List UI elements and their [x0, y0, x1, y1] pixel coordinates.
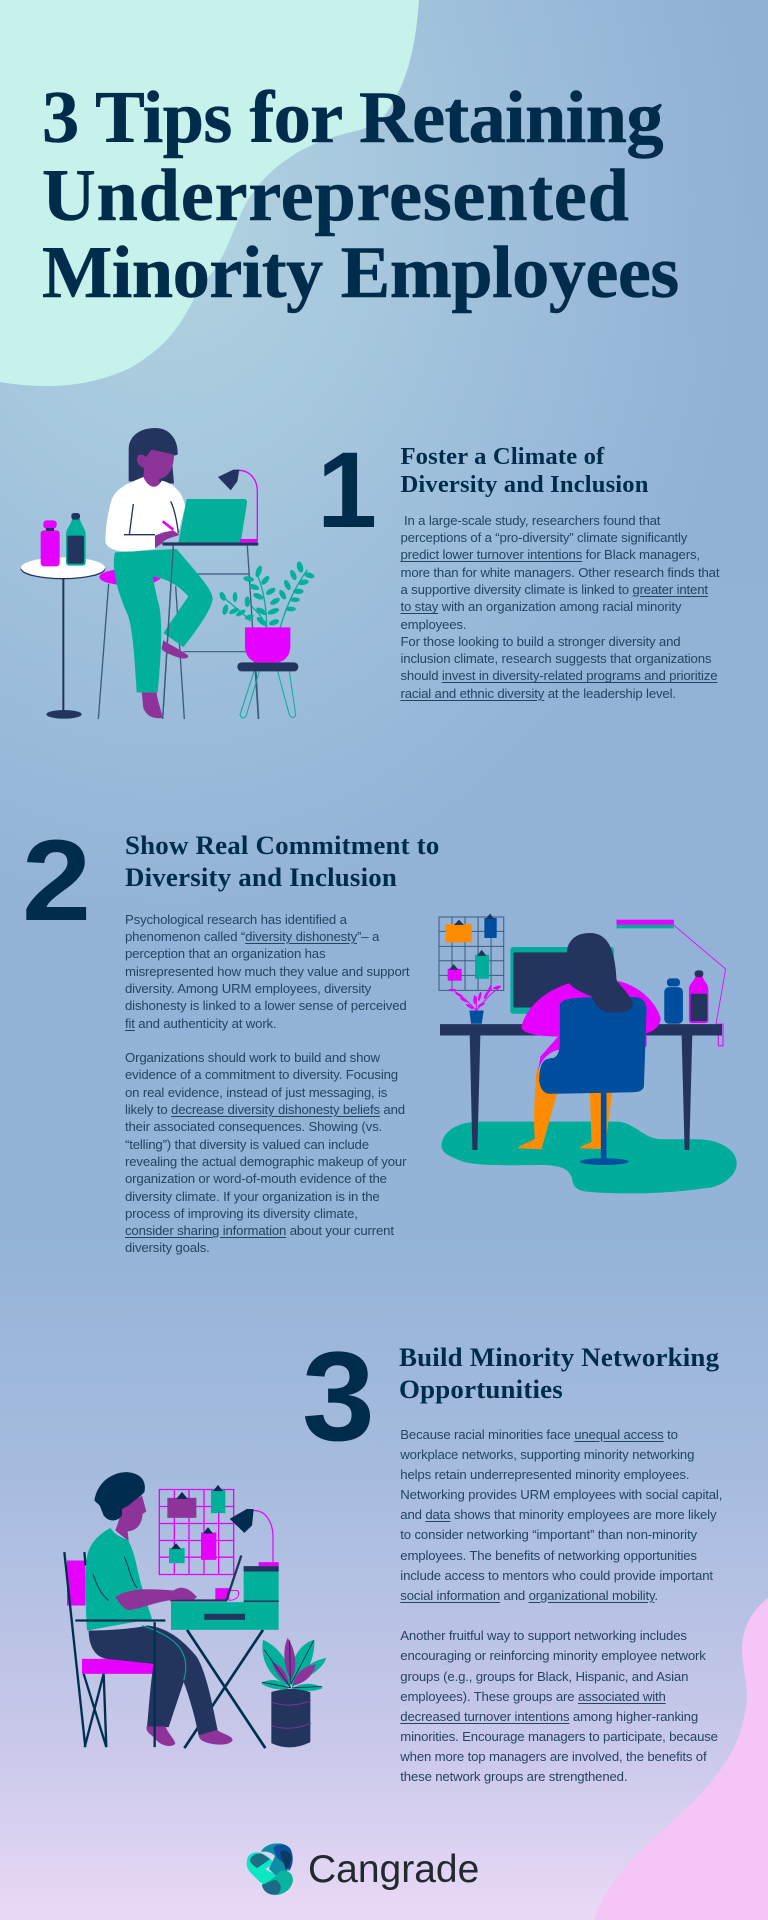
body text 3: employees. The benefits of networking opportunities	[400, 1548, 697, 1563]
illustration 1: woman at standing desk	[20, 428, 314, 719]
task lamp	[617, 920, 726, 1046]
face	[137, 450, 174, 489]
heading 2: Show Real Commitment to	[125, 830, 440, 860]
body text 2: diversity. Among URM employees, diversity	[125, 981, 371, 996]
body text 2: Psychological research has identified a	[125, 912, 347, 927]
body text 2: dishonesty is linked to a lower sense of perceived	[125, 998, 407, 1013]
body text 2: evidence of a commitment to diversity. Focusing	[125, 1067, 398, 1082]
body text 3: Another fruitful way to support networking includes	[400, 1628, 687, 1643]
storage box	[244, 1566, 279, 1602]
body text 2: diversity goals.	[125, 1240, 210, 1255]
shirt	[85, 1528, 152, 1630]
body text 3: social information and organizational mobility.	[400, 1588, 658, 1603]
orange legs	[518, 1067, 613, 1149]
desk top	[162, 542, 258, 546]
body text 1: For those looking to build a stronger diversity and	[400, 634, 680, 649]
monitor	[510, 947, 614, 1014]
shirt lines	[124, 501, 178, 535]
title: Underrepresented	[42, 155, 630, 237]
chair frame	[64, 1552, 106, 1747]
body text 3: helps retain underrepresented minority employees.	[400, 1467, 689, 1482]
logo mark	[246, 1843, 293, 1895]
body text 3: and data shows that minority employees are more likely	[400, 1507, 716, 1522]
illustration 2: woman at desk from behind	[438, 914, 737, 1194]
side table	[21, 557, 105, 719]
trousers	[89, 1626, 218, 1736]
body text 3: employees). These groups are associated with	[400, 1689, 666, 1704]
side desk arm	[75, 1620, 165, 1747]
body text 3: Networking provides URM employees with social capital,	[400, 1487, 722, 1502]
body text 2: perception that an organization has	[125, 946, 325, 961]
chair back	[67, 1560, 154, 1674]
desk frame	[163, 546, 258, 719]
body text 3: decreased turnover intentions among higher-ranking	[400, 1709, 698, 1724]
wire grid	[439, 917, 504, 990]
clipboards	[446, 914, 497, 981]
body text 3: Because racial minorities face unequal access to	[400, 1427, 678, 1442]
plant stool	[237, 662, 298, 719]
body text 2: Organizations should work to build and show	[125, 1050, 380, 1065]
floor rug	[441, 1122, 737, 1193]
body text 3: workplace networks, supporting minority networking	[400, 1447, 694, 1462]
hair	[129, 428, 178, 484]
white top	[106, 477, 185, 552]
plant	[218, 561, 315, 628]
front foot	[162, 640, 188, 658]
wire grid	[159, 1490, 234, 1574]
body text 3: groups (e.g., groups for Black, Hispanic, and Asian	[400, 1669, 688, 1684]
chair	[539, 997, 647, 1165]
body text 1	[400, 513, 720, 701]
body text 1: more than for white managers. Other research finds that	[400, 565, 719, 580]
body text 2: process of improving its diversity climate,	[125, 1206, 358, 1221]
background blob: mint top-left	[0, 0, 419, 386]
body text 3	[400, 1427, 722, 1784]
body text 3: include access to mentors who could provide important	[400, 1568, 713, 1583]
heading 2	[125, 830, 440, 892]
background blob: pink bottom-right	[594, 1598, 768, 1920]
heading 3: Opportunities	[399, 1374, 563, 1404]
heading 3: Build Minority Networking	[399, 1342, 719, 1372]
body text 1: racial and ethnic diversity at the leadership level.	[400, 686, 676, 701]
body text 2: their associated consequences. Showing (vs.	[125, 1119, 382, 1134]
body text 2	[125, 912, 410, 1255]
pen	[163, 521, 173, 530]
desk	[171, 1602, 279, 1748]
body text 2: consider sharing information about your current	[125, 1223, 394, 1238]
heading 1	[400, 442, 649, 498]
small pot	[469, 1010, 484, 1024]
desk	[440, 1024, 722, 1150]
hair	[566, 933, 633, 1013]
title: Minority Employees	[42, 232, 679, 314]
body text 2: “telling”) that diversity is valued can include	[125, 1137, 369, 1152]
magenta bottle	[41, 520, 60, 566]
number 1: 1	[317, 429, 377, 550]
body text 1: to stay with an organization among racial minority	[400, 599, 681, 614]
number 2: 2	[22, 817, 91, 945]
body text 2: phenomenon called “diversity dishonesty”– a	[125, 929, 379, 944]
body text 3: to consider networking “important” than non-minority	[400, 1527, 697, 1542]
body text 3: these network groups are strengthened.	[400, 1769, 627, 1784]
hand	[155, 530, 179, 548]
body text 3: encouraging or reinforcing minority employee network	[400, 1648, 706, 1663]
desk leg over knee	[163, 546, 173, 719]
stool	[98, 569, 184, 719]
body text 2: revealing the actual demographic makeup of your	[125, 1154, 406, 1169]
body text 2: organization or word-of-mouth evidence of the	[125, 1171, 387, 1186]
body text 2: fit and authenticity at work.	[125, 1016, 276, 1031]
feet	[146, 1726, 233, 1746]
hair	[94, 1472, 145, 1520]
body text 1: predict lower turnover intentions for Black managers,	[400, 547, 700, 562]
body text 2: likely to decrease diversity dishonesty beliefs and	[125, 1102, 405, 1117]
number 3: 3	[302, 1325, 375, 1467]
body text 2: diversity climate. If your organization is in the	[125, 1189, 380, 1204]
blue bottle	[664, 978, 683, 1024]
shirt lines	[93, 1556, 137, 1600]
body text 1: In a large-scale study, researchers found that	[404, 513, 660, 528]
face	[115, 1496, 146, 1541]
illustration 3: man at laptop	[63, 1472, 326, 1749]
body text 2: on real evidence, instead of just messaging, is	[125, 1085, 387, 1100]
plant	[261, 1638, 326, 1691]
body text 1: a supportive diversity climate is linked to greater intent	[400, 582, 708, 597]
desk lamp	[218, 470, 257, 542]
cylinder pot	[271, 1689, 311, 1747]
clipboards	[167, 1485, 225, 1563]
title: 3 Tips for Retaining	[42, 77, 663, 159]
magenta top	[521, 981, 661, 1080]
laptop	[170, 1556, 241, 1600]
body text 2: misrepresented how much they value and support	[125, 964, 409, 979]
body text 1: perceptions of a “pro-diversity” climate significantly	[400, 530, 687, 545]
magenta bottle	[689, 970, 708, 1023]
heading 3	[399, 1342, 719, 1404]
plant pot	[245, 627, 290, 662]
lamp	[230, 1509, 279, 1566]
heading 2: Diversity and Inclusion	[125, 862, 397, 892]
heading 1: Diversity and Inclusion	[400, 471, 649, 498]
logo: Cangrade	[246, 1843, 479, 1895]
title	[42, 77, 679, 314]
body text 3: when more top managers are involved, the benefits of	[400, 1749, 706, 1764]
heading 1: Foster a Climate of	[400, 442, 604, 470]
trouser seam	[142, 1626, 186, 1680]
back foot	[142, 692, 162, 718]
body text 1: inclusion climate, research suggests that organizations	[400, 651, 711, 666]
logo wordmark: Cangrade	[308, 1848, 479, 1891]
laptop	[178, 499, 247, 542]
body text 1: employees.	[400, 617, 466, 632]
small plant	[448, 985, 502, 1010]
body text 1: should invest in diversity-related programs and prioritize	[400, 668, 717, 683]
green bottle	[66, 513, 86, 566]
coffee cup	[215, 1588, 239, 1600]
green trousers	[114, 549, 213, 692]
arm	[115, 1588, 197, 1610]
body text 3: minorities. Encourage managers to participate, because	[400, 1729, 718, 1744]
